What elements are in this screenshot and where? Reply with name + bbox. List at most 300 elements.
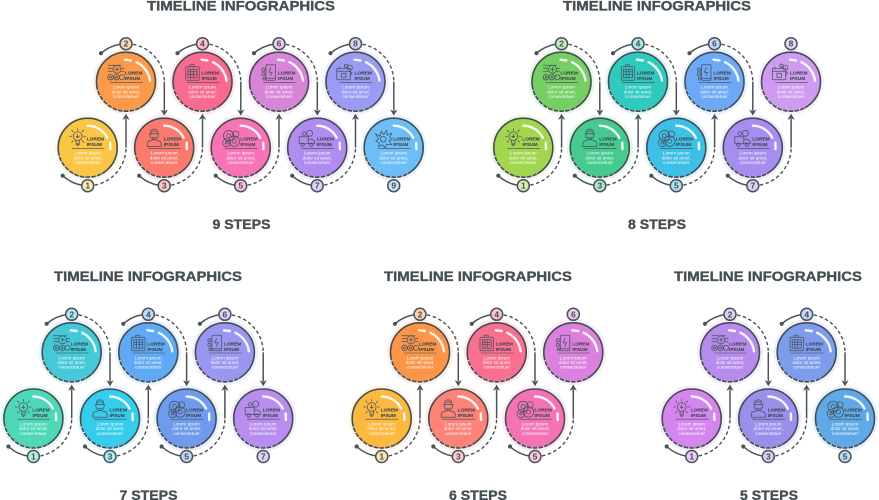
step text: Lorem ipsum (58, 355, 85, 360)
step text: consectetuer (97, 431, 124, 436)
step heading (263, 408, 280, 419)
icon: calendar (772, 64, 788, 80)
step text (303, 151, 332, 165)
step heading (844, 408, 862, 419)
step text: Lorem ipsum (778, 85, 804, 90)
step text (777, 85, 805, 99)
step heading: IPSUM (534, 413, 550, 419)
step text: consectetuer (510, 160, 537, 165)
icon: phone (697, 65, 711, 80)
step text: Lorem ipsum (560, 355, 587, 360)
step heading: LOREM (714, 71, 731, 77)
step text: dolor sit amet, (509, 155, 538, 160)
step text: consectetuer (173, 431, 200, 436)
panel: 6 steps timeline (349, 268, 606, 500)
step text: consectetuer (778, 94, 805, 99)
connector arrow (61, 114, 130, 185)
connector arrow (611, 44, 680, 116)
step text: consectetuer (663, 160, 690, 165)
step text (96, 422, 124, 436)
step heading: LOREM (125, 71, 142, 77)
icon: gears (658, 130, 675, 147)
step 4 (774, 308, 849, 386)
icon: clipboard (480, 335, 493, 351)
badge 4: 4 (636, 39, 641, 49)
step heading (599, 137, 617, 148)
step text: Lorem ipsum (250, 422, 277, 426)
badge 6: 6 (277, 39, 282, 49)
connector arrow (198, 315, 267, 386)
step heading (164, 137, 181, 148)
step text (367, 422, 396, 436)
step 3 (567, 114, 642, 192)
step text: consectetuer (304, 160, 331, 165)
step heading: IPSUM (768, 413, 783, 419)
step text: dolor sit amet, (482, 360, 511, 365)
step text (112, 85, 140, 99)
step heading (354, 71, 372, 82)
badge 5: 5 (533, 452, 538, 462)
step heading: LOREM (147, 341, 165, 347)
step heading: IPSUM (186, 413, 201, 419)
step heading (419, 341, 436, 353)
step text: Lorem ipsum (212, 355, 238, 360)
icon: control panel (712, 336, 728, 351)
step text: consectetuer (717, 365, 744, 370)
step text: dolor sit amet, (792, 360, 821, 365)
connector arrow (470, 315, 539, 386)
step heading (790, 71, 807, 82)
step heading: LOREM (32, 408, 50, 414)
step 1 (659, 385, 734, 462)
step text: Lorem ipsum (304, 151, 331, 156)
step text: Lorem ipsum (793, 355, 820, 360)
badge 1: 1 (521, 181, 526, 191)
step heading (71, 341, 88, 353)
connector arrow (726, 114, 795, 185)
step text (406, 355, 434, 370)
step heading: LOREM (768, 408, 785, 414)
step heading: IPSUM (844, 413, 860, 419)
step heading (381, 408, 398, 419)
step text: dolor sit amet, (700, 89, 729, 94)
badge 1: 1 (31, 452, 36, 462)
connector arrow (687, 44, 756, 116)
step text: consectetuer (679, 431, 705, 436)
step text: Lorem ipsum (625, 85, 651, 90)
step text (585, 151, 614, 165)
icon: clipboard (186, 65, 199, 80)
step heading (458, 408, 475, 419)
step text: Lorem ipsum (510, 151, 537, 156)
step text: dolor sit amet, (585, 155, 614, 160)
step 1 (55, 114, 130, 192)
panel: 8 steps timeline (490, 0, 824, 232)
step heading (768, 408, 785, 419)
step heading: LOREM (599, 137, 617, 143)
step text: dolor sit amet, (150, 155, 179, 160)
step text: Lorem ipsum (587, 151, 613, 156)
step heading (240, 137, 258, 148)
step heading: IPSUM (263, 413, 278, 419)
step heading: LOREM (496, 341, 513, 347)
badge 6: 6 (223, 309, 228, 319)
step heading: LOREM (164, 137, 181, 143)
icon: worker (441, 400, 455, 417)
step text (792, 355, 821, 370)
step heading (496, 341, 513, 353)
step heading: IPSUM (560, 76, 576, 82)
step text (509, 151, 538, 165)
title: TIMELINE INFOGRAPHICS (384, 268, 572, 284)
step heading: LOREM (458, 408, 475, 414)
connector arrow (431, 385, 500, 456)
step 6 (192, 308, 267, 386)
step heading: IPSUM (676, 142, 691, 148)
step heading: LOREM (317, 137, 334, 143)
step text: dolor sit amet, (677, 426, 706, 431)
title: TIMELINE INFOGRAPHICS (674, 268, 862, 284)
step text: dolor sit amet, (210, 360, 239, 365)
step heading: LOREM (752, 137, 770, 143)
step text: dolor sit amet, (406, 360, 434, 365)
step heading: LOREM (676, 137, 693, 143)
step text: Lorem ipsum (227, 151, 254, 156)
step text: dolor sit amet, (73, 155, 102, 160)
step text: Lorem ipsum (380, 151, 407, 156)
step text: consectetuer (135, 365, 162, 370)
step text: dolor sit amet, (662, 155, 691, 160)
step text: dolor sit amet, (112, 89, 140, 94)
step text (226, 151, 255, 165)
icon: gears (517, 401, 534, 418)
icon: control panel (543, 65, 560, 80)
badge 4: 4 (200, 39, 205, 49)
step heading: IPSUM (71, 347, 86, 353)
step text: consectetuer (113, 94, 140, 99)
caption: 9 STEPS (212, 216, 270, 232)
step heading: IPSUM (729, 347, 744, 353)
badge 3: 3 (597, 181, 602, 191)
step heading: LOREM (240, 137, 258, 143)
icon: gears (223, 130, 239, 147)
step heading: LOREM (729, 341, 746, 347)
step heading: LOREM (186, 408, 203, 414)
step heading (560, 71, 578, 82)
step text: Lorem ipsum (368, 422, 395, 426)
icon: light bulb (70, 129, 86, 146)
step text: consectetuer (407, 365, 434, 370)
step text (73, 151, 102, 165)
step 6 (682, 38, 756, 116)
step heading (393, 137, 411, 148)
badge 3: 3 (108, 452, 113, 462)
step text: dolor sit amet, (716, 360, 744, 365)
badge 6: 6 (571, 309, 576, 319)
step text: dolor sit amet, (96, 426, 124, 431)
connector arrow (665, 385, 734, 456)
step text (700, 85, 729, 99)
step text: Lorem ipsum (266, 85, 292, 90)
step text: dolor sit amet, (188, 89, 217, 94)
step text: consectetuer (740, 160, 766, 165)
step text (754, 422, 783, 436)
step text: consectetuer (189, 94, 216, 99)
step 2 (387, 308, 462, 386)
step text (559, 355, 588, 370)
step text: consectetuer (445, 431, 472, 436)
step text: consectetuer (228, 160, 254, 165)
step 1 (0, 385, 75, 462)
step 2 (93, 38, 168, 116)
step text: consectetuer (381, 160, 407, 165)
step heading: IPSUM (393, 142, 408, 148)
step heading: LOREM (263, 408, 280, 414)
step heading: LOREM (560, 71, 578, 77)
connector arrow (99, 44, 168, 116)
connector arrow (741, 385, 810, 456)
badge 5: 5 (238, 181, 243, 191)
step text (547, 85, 576, 99)
step text: consectetuer (75, 160, 101, 165)
step text: consectetuer (832, 431, 859, 436)
step text (341, 85, 370, 99)
badge 5: 5 (843, 452, 848, 462)
step 5 (208, 114, 283, 192)
step text: consectetuer (755, 431, 782, 436)
step heading: IPSUM (790, 76, 805, 82)
step heading: LOREM (393, 137, 411, 143)
step heading: IPSUM (354, 76, 370, 82)
badge 7: 7 (261, 452, 266, 462)
step heading: IPSUM (806, 347, 821, 353)
step text: Lorem ipsum (20, 422, 47, 426)
step heading: LOREM (522, 137, 540, 143)
connector arrow (649, 114, 718, 185)
badge 8: 8 (789, 39, 794, 49)
badge 8: 8 (353, 39, 358, 49)
step text: consectetuer (20, 431, 47, 436)
step heading: LOREM (806, 341, 823, 347)
step text (482, 355, 511, 370)
step heading: IPSUM (599, 142, 615, 148)
step 1 (490, 114, 565, 192)
connector arrow (6, 385, 75, 456)
icon: burst (375, 130, 392, 148)
step text: Lorem ipsum (740, 151, 766, 156)
step text: consectetuer (369, 431, 395, 436)
step text (249, 422, 278, 436)
step text: Lorem ipsum (173, 422, 200, 426)
step text: dolor sit amet, (738, 155, 767, 160)
step heading (32, 408, 50, 419)
step heading (714, 71, 731, 82)
step text: Lorem ipsum (97, 422, 123, 426)
step heading: LOREM (224, 341, 241, 347)
step text: consectetuer (342, 94, 369, 99)
badge 2: 2 (418, 309, 423, 319)
step 5 (502, 385, 577, 462)
step text: consectetuer (250, 431, 277, 436)
step heading: IPSUM (458, 413, 473, 419)
step text (188, 85, 217, 99)
step 3 (131, 114, 206, 192)
step text: Lorem ipsum (342, 85, 369, 90)
icon: light bulb (505, 129, 521, 146)
badge 3: 3 (456, 452, 461, 462)
step 6 (540, 308, 606, 385)
step text: Lorem ipsum (135, 355, 162, 360)
step heading: LOREM (790, 71, 807, 77)
step heading (522, 137, 540, 148)
badge 3: 3 (766, 452, 771, 462)
icon: light bulb (674, 400, 690, 416)
step text: dolor sit amet, (226, 155, 255, 160)
badge 2: 2 (69, 309, 74, 319)
step text: consectetuer (560, 365, 587, 370)
step 3 (425, 385, 500, 462)
icon: control panel (402, 336, 418, 351)
icon: clipboard (621, 65, 635, 80)
step heading (676, 137, 693, 148)
step text (444, 422, 473, 436)
title: TIMELINE INFOGRAPHICS (54, 268, 242, 284)
step text (831, 422, 859, 436)
icon: truck (299, 130, 315, 146)
step text (172, 422, 201, 436)
step text: consectetuer (587, 160, 613, 165)
step text: dolor sit amet, (341, 89, 370, 94)
step heading (87, 137, 104, 148)
step heading (572, 341, 590, 353)
badge 5: 5 (674, 181, 679, 191)
panel: 9 steps timeline (55, 0, 427, 232)
icon: worker (147, 129, 161, 146)
step heading: IPSUM (572, 347, 588, 353)
step heading: IPSUM (637, 76, 652, 82)
step text (379, 151, 408, 165)
icon: truck (245, 401, 261, 417)
connector arrow (160, 385, 228, 456)
step heading (224, 341, 241, 353)
caption: 8 STEPS (628, 216, 686, 232)
badge 4: 4 (494, 309, 499, 319)
icon: control panel (53, 336, 70, 351)
step 4 (605, 38, 680, 116)
icon: gears (827, 401, 844, 418)
step 5 (812, 386, 878, 462)
step 4 (464, 308, 539, 386)
step text (57, 355, 86, 370)
step heading: IPSUM (317, 142, 332, 148)
icon: phone (262, 65, 276, 80)
step heading (110, 408, 127, 419)
step text: Lorem ipsum (483, 355, 510, 360)
badge 7: 7 (315, 181, 320, 191)
step heading: IPSUM (278, 76, 293, 82)
connector arrow (393, 315, 462, 386)
step heading: LOREM (572, 341, 590, 347)
step text: dolor sit amet, (521, 426, 549, 431)
step heading: IPSUM (32, 413, 48, 419)
icon: worker (751, 400, 765, 417)
step 5 (643, 114, 718, 192)
step text: dolor sit amet, (444, 426, 473, 431)
badge 1: 1 (689, 452, 694, 462)
panel: 7 steps timeline (0, 268, 296, 500)
icon: calendar (337, 64, 352, 80)
step heading: LOREM (844, 408, 862, 414)
step text: consectetuer (701, 94, 728, 99)
step heading (202, 71, 219, 82)
badge 2: 2 (124, 39, 129, 49)
step heading: IPSUM (164, 142, 179, 148)
step heading (691, 408, 708, 419)
step heading: IPSUM (419, 347, 434, 353)
step text (677, 422, 706, 436)
connector arrow (496, 114, 565, 185)
step text (19, 422, 48, 436)
step text: dolor sit amet, (134, 360, 163, 365)
step heading (317, 137, 334, 148)
step text (738, 151, 767, 165)
step text (210, 355, 239, 370)
step 9 (361, 115, 427, 192)
connector arrow (137, 114, 206, 185)
step heading (637, 71, 654, 82)
step text: dolor sit amet, (559, 360, 588, 365)
step 1 (349, 385, 424, 462)
step heading: IPSUM (496, 347, 511, 353)
step 5 (154, 385, 228, 462)
connector arrow (45, 315, 114, 386)
step text: Lorem ipsum (407, 355, 433, 360)
step text: consectetuer (484, 365, 510, 370)
badge 9: 9 (391, 181, 396, 191)
icon: light bulb (364, 400, 380, 416)
step 8 (758, 38, 824, 115)
step heading (752, 137, 770, 148)
badge 6: 6 (712, 39, 717, 49)
step text: consectetuer (625, 94, 652, 99)
icon: worker (93, 400, 107, 417)
badge 1: 1 (85, 181, 90, 191)
step text: dolor sit amet, (172, 426, 201, 431)
step text: Lorem ipsum (189, 85, 216, 90)
step heading (806, 341, 823, 353)
step heading: IPSUM (224, 347, 239, 353)
step 6 (246, 38, 321, 116)
step text: dolor sit amet, (624, 89, 652, 94)
step heading (147, 341, 165, 353)
icon: clipboard (132, 335, 145, 351)
icon: gears (169, 401, 185, 418)
step 3 (77, 385, 152, 462)
step text (150, 151, 179, 165)
step heading: LOREM (87, 137, 104, 143)
icon: clipboard (790, 335, 803, 351)
connector arrow (780, 315, 849, 386)
step 2 (697, 308, 772, 386)
badge 7: 7 (750, 181, 755, 191)
step heading: IPSUM (714, 76, 729, 82)
icon: truck (735, 130, 750, 146)
step 8 (322, 38, 397, 116)
connector arrow (328, 44, 397, 116)
step heading: LOREM (354, 71, 372, 77)
step heading: IPSUM (125, 76, 140, 82)
badge 3: 3 (162, 181, 167, 191)
